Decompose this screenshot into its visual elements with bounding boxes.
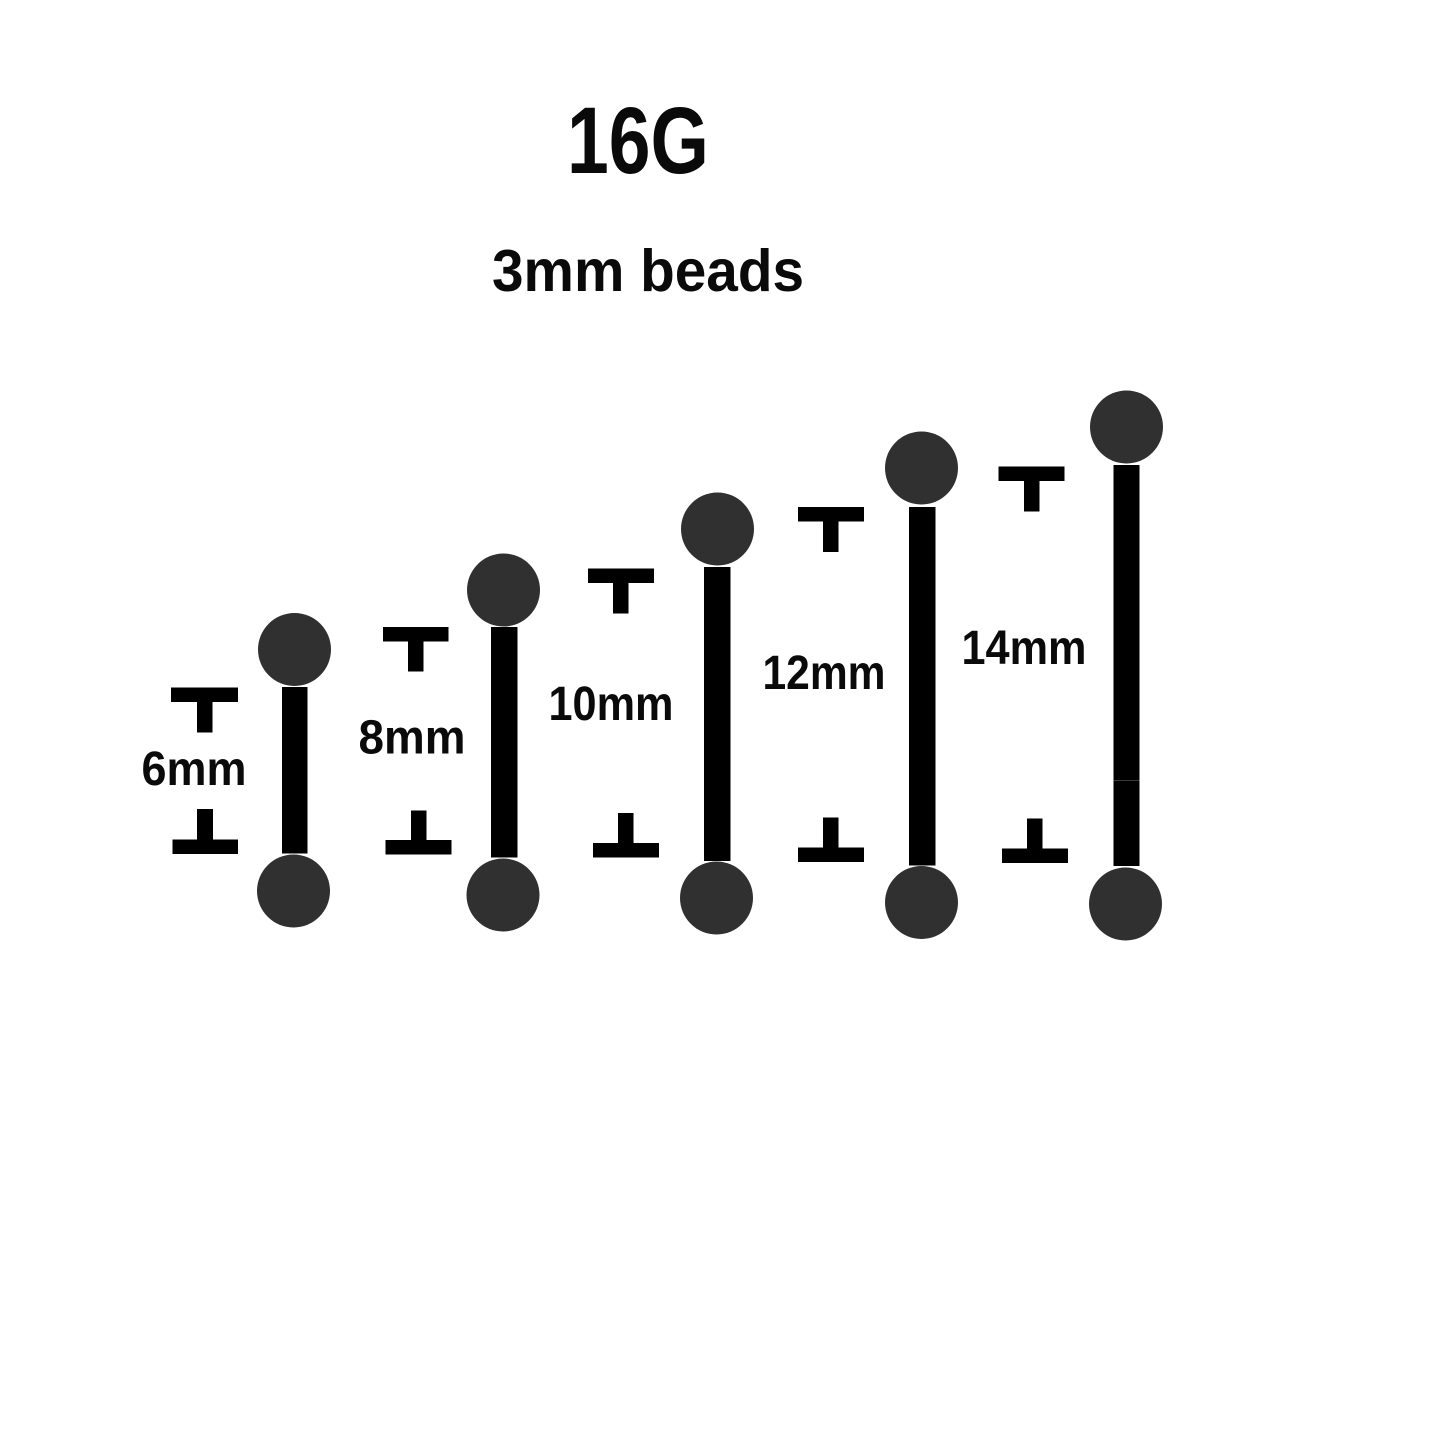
label 6mm: 6mm xyxy=(142,743,246,796)
label 14mm: 14mm xyxy=(962,622,1086,675)
barbell 12mm xyxy=(885,432,958,939)
measure marks 12mm xyxy=(798,507,864,862)
barbell 6mm xyxy=(257,613,331,928)
label 8mm: 8mm xyxy=(358,712,466,764)
label 10mm: 10mm xyxy=(548,678,674,731)
barbell 10mm xyxy=(680,492,754,934)
barbell 8mm xyxy=(466,554,540,932)
measure marks 8mm xyxy=(383,627,452,854)
measure marks 10mm xyxy=(588,568,659,858)
barbell 14mm xyxy=(1089,390,1163,940)
title: 16G xyxy=(567,88,709,194)
subtitle: 3mm beads xyxy=(492,238,804,304)
measure marks 14mm xyxy=(998,466,1068,863)
measure marks 6mm xyxy=(171,688,238,854)
label 12mm: 12mm xyxy=(762,647,886,700)
